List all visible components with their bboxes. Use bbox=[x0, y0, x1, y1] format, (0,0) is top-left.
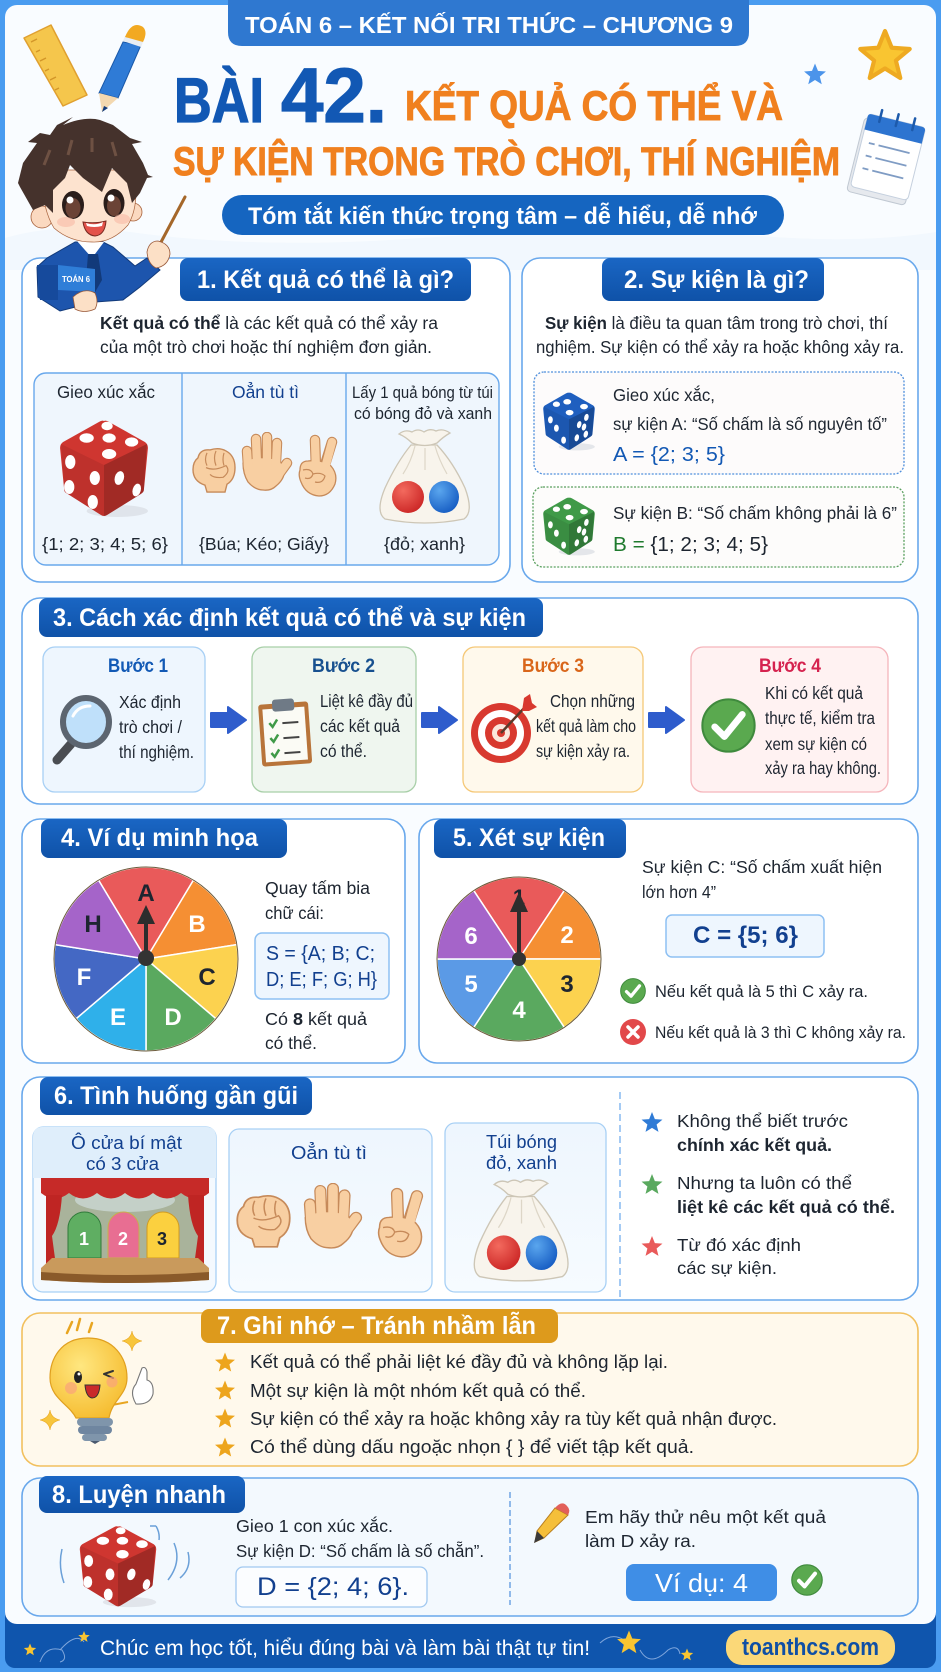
step 1: Bước 1 bbox=[108, 656, 168, 677]
heading 5 bbox=[434, 819, 626, 858]
card: bag of balls: đỏ, xanh bbox=[486, 1153, 557, 1173]
event B box: Sự kiện B: “Số chấm không phải là 6” bbox=[613, 503, 897, 523]
count note bbox=[265, 1009, 367, 1053]
icon: check circle bbox=[702, 699, 755, 752]
step 3: sự kiện xảy ra. bbox=[536, 741, 630, 761]
spinner: numbers: 1 bbox=[513, 885, 525, 910]
event C text bbox=[642, 857, 882, 902]
set S box: D; E; F; G; H} bbox=[266, 969, 377, 991]
spinner: numbers: 5 bbox=[464, 971, 478, 998]
takeaway 3: Từ đó xác định bbox=[677, 1235, 801, 1255]
card: bag of balls bbox=[445, 1123, 606, 1292]
icon: pencil bbox=[99, 25, 146, 112]
set D box bbox=[236, 1567, 427, 1607]
heading 3 bbox=[39, 598, 543, 637]
column: dice bbox=[42, 381, 168, 554]
column: rock paper scissors: Oẳn tù tì bbox=[232, 381, 299, 402]
takeaway 2: liệt kê các kết quả có thể. bbox=[677, 1197, 895, 1217]
heading 1 bbox=[180, 258, 471, 301]
prompt: Em hãy thử nêu một kết quả bbox=[585, 1507, 826, 1527]
set C box bbox=[666, 915, 824, 957]
icon: light bulb mascot bbox=[40, 1319, 153, 1444]
icon: pencil bbox=[534, 1503, 569, 1543]
step 2: Bước 2 bbox=[312, 656, 375, 677]
subtitle pill: Tóm tắt kiến thức trọng tâm – dễ hiểu, dễ nhớ bbox=[248, 202, 758, 230]
step 3: Chọn những bbox=[550, 691, 635, 711]
card: bag of balls: Túi bóng bbox=[486, 1132, 557, 1152]
card: three doors: có 3 cửa bbox=[86, 1154, 160, 1174]
spinner caption: chữ cái: bbox=[265, 903, 324, 923]
heading 2 bbox=[602, 258, 824, 301]
heading 3: 3. Cách xác định kết quả có thể và sự kiện bbox=[53, 604, 526, 632]
spinner: letters: H bbox=[84, 911, 102, 938]
column: bag of balls: {đỏ; xanh} bbox=[384, 534, 465, 554]
top banner bbox=[228, 0, 749, 46]
heading 5: 5. Xét sự kiện bbox=[453, 824, 605, 852]
step 3: Bước 3 bbox=[522, 656, 584, 677]
spinner: letters: C bbox=[198, 964, 216, 991]
description 1: của một trò chơi hoặc thí nghiệm đơn giản. bbox=[100, 337, 432, 357]
card: three doors: Ô cửa bí mật bbox=[71, 1132, 182, 1153]
heading 1: 1. Kết quả có thể là gì? bbox=[197, 266, 454, 294]
suit bbox=[37, 242, 160, 311]
description 2: nghiệm. Sự kiện có thể xảy ra hoặc không xảy ra. bbox=[536, 337, 904, 357]
title: KẾT QUẢ CÓ THỂ VÀ bbox=[405, 82, 783, 129]
count note: Có 8 kết quả bbox=[265, 1009, 367, 1029]
footer message: Chúc em học tốt, hiểu đúng bài và làm bài thật tự tin! bbox=[100, 1637, 590, 1660]
title: SỰ KIỆN TRONG TRÒ CHƠI, THÍ NGHIỆM bbox=[173, 140, 840, 184]
mouth bbox=[83, 221, 106, 236]
face bbox=[31, 206, 53, 228]
set S box bbox=[255, 933, 389, 999]
icon: clipboard bbox=[258, 697, 312, 767]
takeaway 3 bbox=[642, 1235, 801, 1278]
card: rock paper scissors: Oẳn tù tì bbox=[291, 1142, 367, 1163]
answer button bbox=[626, 1564, 777, 1601]
spinner: letters: A bbox=[137, 880, 155, 907]
description 2 bbox=[536, 313, 904, 357]
arrow 3 bbox=[649, 707, 684, 733]
spinner: letters: E bbox=[110, 1004, 126, 1031]
result: occurs bbox=[621, 979, 868, 1003]
step 2: có thể. bbox=[320, 741, 367, 761]
step 4: Khi có kết quả bbox=[765, 683, 863, 703]
step 4: Bước 4 bbox=[759, 656, 821, 677]
column: bag of balls bbox=[352, 384, 493, 554]
column: bag of balls: có bóng đỏ và xanh bbox=[354, 405, 492, 423]
step 1: trò chơi / bbox=[119, 717, 182, 737]
spinner caption: Quay tấm bia bbox=[265, 878, 370, 898]
column: dice: {1; 2; 3; 4; 5; 6} bbox=[42, 534, 168, 554]
spinner: letters bbox=[54, 867, 238, 1051]
footer bar bbox=[5, 1590, 936, 1668]
icon: answer check bbox=[792, 1565, 822, 1595]
result: does not occur bbox=[620, 1019, 906, 1045]
icon: magnifier bbox=[57, 698, 109, 760]
spinner: numbers bbox=[437, 877, 601, 1041]
website pill: toanthcs.com bbox=[742, 1634, 879, 1661]
takeaway 3: các sự kiện. bbox=[677, 1258, 777, 1278]
reminder 2: Một sự kiện là một nhóm kết quả có thể. bbox=[250, 1381, 586, 1401]
practice question: Gieo 1 con xúc xắc. bbox=[236, 1515, 393, 1536]
step 2 bbox=[252, 647, 416, 792]
takeaway 2: Nhưng ta luôn có thể bbox=[677, 1173, 852, 1193]
takeaway 1: chính xác kết quả. bbox=[677, 1135, 832, 1155]
illustration: stage: 3 bbox=[157, 1229, 167, 1249]
pointer stick bbox=[160, 197, 185, 244]
takeaway 1: Không thể biết trước bbox=[677, 1111, 848, 1131]
heading 8: 8. Luyện nhanh bbox=[52, 1481, 226, 1509]
panel: 2 events bbox=[522, 258, 918, 582]
heading 6 bbox=[40, 1077, 312, 1115]
spinner: numbers: 6 bbox=[464, 923, 478, 950]
practice question: Sự kiện D: “Số chấm là số chẵn”. bbox=[236, 1541, 484, 1561]
step 1 bbox=[43, 647, 205, 792]
heading 2: 2. Sự kiện là gì? bbox=[624, 266, 809, 294]
heading 6: 6. Tình huống gần gũi bbox=[54, 1082, 298, 1110]
practice question bbox=[236, 1515, 484, 1561]
eyes bbox=[62, 191, 84, 219]
icon: target bbox=[471, 694, 537, 763]
subtitle pill bbox=[222, 195, 784, 235]
panel: 3 steps bbox=[22, 598, 918, 804]
column: bag of balls: Lấy 1 quả bóng từ túi bbox=[352, 384, 493, 402]
step 2: các kết quả bbox=[320, 716, 400, 736]
event A box: Gieo xúc xắc, bbox=[613, 384, 715, 405]
panel: 6 familiar situations bbox=[22, 1077, 918, 1300]
cheeks bbox=[57, 217, 75, 227]
event B box bbox=[533, 487, 904, 567]
step 1: thí nghiệm. bbox=[119, 742, 194, 762]
spinner: letters: F bbox=[77, 964, 91, 991]
lower hand bbox=[73, 291, 97, 312]
result: does not occur: Nếu kết quả là 3 thì C không xảy ra. bbox=[655, 1024, 906, 1042]
card: three doors bbox=[33, 1127, 216, 1292]
step 4: xảy ra hay không. bbox=[765, 758, 881, 778]
column: rock paper scissors: {Búa; Kéo; Giấy} bbox=[199, 534, 329, 554]
spinner: numbers: 2 bbox=[560, 922, 574, 949]
card: rock paper scissors bbox=[229, 1129, 432, 1292]
arrow 1 bbox=[211, 707, 246, 733]
website pill bbox=[726, 1630, 895, 1665]
prompt: làm D xảy ra. bbox=[585, 1531, 696, 1551]
step 3: kết quả làm cho bbox=[536, 716, 636, 736]
icon: rolling die bbox=[60, 1526, 189, 1607]
arrow 2 bbox=[422, 707, 457, 733]
heading 4: 4. Ví dụ minh họa bbox=[61, 824, 259, 852]
book bbox=[37, 265, 95, 300]
event B box: B = {1; 2; 3; 4; 5} bbox=[613, 534, 768, 556]
description 1 bbox=[100, 313, 438, 357]
step 4 bbox=[691, 647, 888, 792]
step 4: xem sự kiện có bbox=[765, 734, 867, 754]
spinner: letters: B bbox=[188, 911, 206, 938]
set S box: S = {A; B; C; bbox=[266, 943, 375, 965]
title bbox=[173, 53, 840, 184]
title: BÀI bbox=[174, 66, 264, 136]
illustration: stage bbox=[41, 1178, 209, 1283]
set C box: C = {5; 6} bbox=[693, 922, 798, 949]
icon: ruler bbox=[24, 25, 87, 106]
heading 4 bbox=[41, 819, 287, 858]
result: occurs: Nếu kết quả là 5 thì C xảy ra. bbox=[655, 983, 868, 1001]
reminder 3: Sự kiện có thể xảy ra hoặc không xảy ra tùy kết quả nhận được. bbox=[250, 1409, 777, 1429]
answer button: Ví dụ: 4 bbox=[655, 1568, 748, 1598]
prompt bbox=[585, 1507, 826, 1551]
spinner: letters: D bbox=[164, 1004, 182, 1031]
description 2: Sự kiện là điều ta quan tâm trong trò chơi, thí bbox=[545, 313, 888, 333]
hair bbox=[18, 117, 153, 213]
panel: 7 remember bbox=[22, 1309, 918, 1466]
count note: có thể. bbox=[265, 1033, 317, 1053]
spinner: numbers: 3 bbox=[560, 971, 574, 998]
column: dice: Gieo xúc xắc bbox=[57, 381, 155, 402]
raised hand bbox=[147, 241, 170, 268]
icon: gold star bbox=[860, 31, 910, 78]
footer message bbox=[24, 1630, 693, 1662]
event A box: sự kiện A: “Số chấm là số nguyên tố” bbox=[613, 414, 887, 434]
step 3 bbox=[463, 647, 643, 792]
set D box: D = {2; 4; 6}. bbox=[257, 1573, 409, 1601]
spinner: numbers: 4 bbox=[512, 997, 526, 1024]
panel: 5 event check bbox=[419, 819, 918, 1063]
heading 8 bbox=[39, 1476, 245, 1513]
heading 7: 7. Ghi nhớ – Tránh nhầm lẫn bbox=[217, 1310, 536, 1340]
takeaway 2 bbox=[642, 1173, 895, 1217]
description 1: Kết quả có thể là các kết quả có thể xảy ra bbox=[100, 313, 438, 333]
teacher boy character bbox=[18, 117, 185, 312]
icon: blue star bbox=[804, 64, 826, 84]
takeaway 1 bbox=[642, 1111, 848, 1155]
title: 42. bbox=[281, 53, 387, 139]
event C text: Sự kiện C: “Số chấm xuất hiện bbox=[642, 857, 882, 877]
panel: 4 example bbox=[22, 819, 405, 1063]
reminder 4: Có thể dùng dấu ngoặc nhọn { } để viết tập kết quả. bbox=[250, 1437, 694, 1457]
reminder 1: Kết quả có thể phải liệt ké đầy đủ và không lặp lại. bbox=[250, 1352, 668, 1372]
step 1: Xác định bbox=[119, 692, 181, 712]
panel: 8 quick practice bbox=[22, 1476, 918, 1616]
spinner caption bbox=[265, 878, 370, 923]
panel: 1 possible outcomes bbox=[22, 258, 510, 582]
step 2: Liệt kê đầy đủ bbox=[320, 691, 413, 711]
event A box: A = {2; 3; 5} bbox=[613, 444, 725, 466]
event A box bbox=[534, 372, 904, 474]
step 4: thực tế, kiểm tra bbox=[765, 708, 875, 728]
illustration: stage: 1 bbox=[79, 1229, 89, 1249]
top banner: TOÁN 6 – KẾT NỐI TRI THỨC – CHƯƠNG 9 bbox=[245, 11, 733, 38]
event C text: lớn hơn 4” bbox=[642, 882, 716, 902]
column: rock paper scissors bbox=[193, 381, 336, 554]
book: TOÁN 6 bbox=[62, 274, 90, 284]
table of three examples bbox=[34, 373, 499, 565]
illustration: stage: 2 bbox=[118, 1229, 128, 1249]
icon: calendar bbox=[847, 107, 927, 206]
